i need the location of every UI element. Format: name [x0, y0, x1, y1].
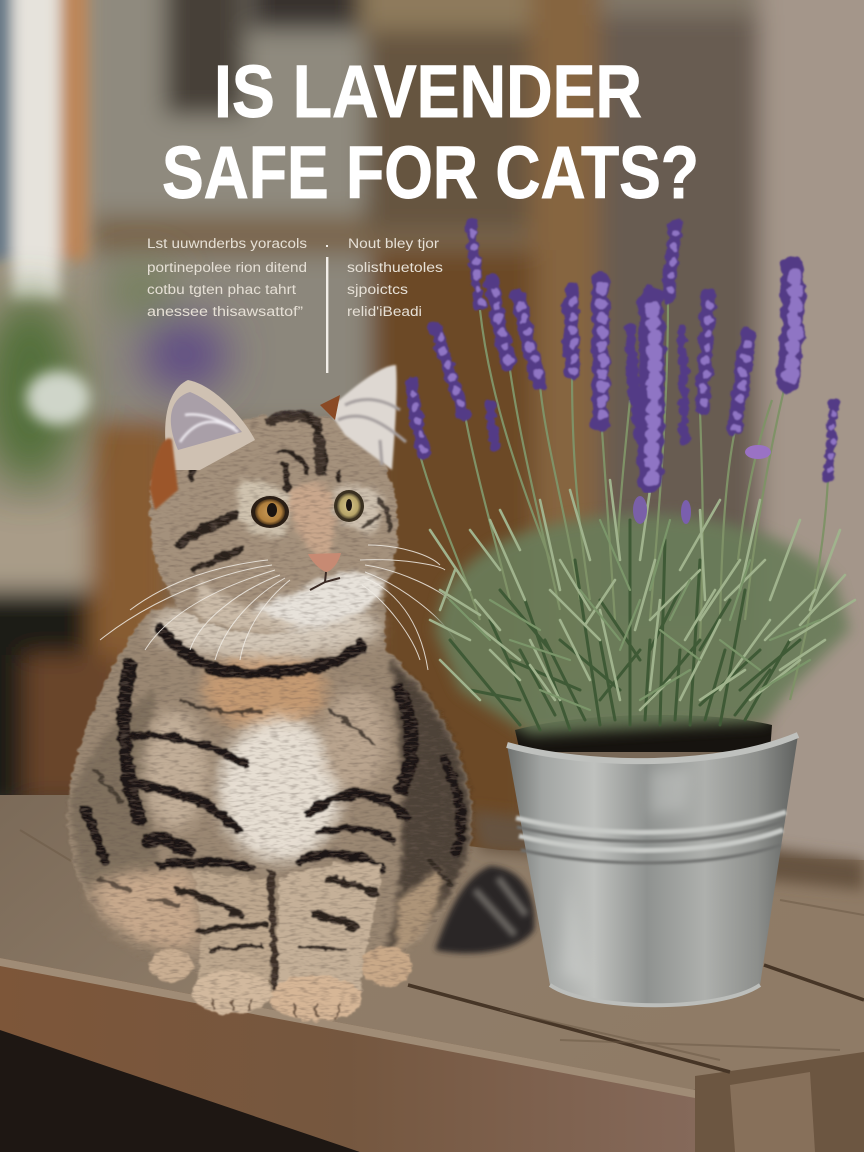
title: SAFE FOR CATS?	[162, 131, 699, 214]
column divider	[326, 245, 328, 373]
whiskers	[100, 545, 455, 670]
bucket rim	[507, 735, 798, 761]
table top surface	[0, 795, 864, 1090]
black inner pot	[515, 715, 772, 752]
front legs	[192, 870, 272, 985]
title: IS LAVENDER	[214, 50, 642, 133]
right text column: Nout bley tjor	[348, 236, 440, 251]
lavender plant	[412, 224, 855, 735]
head	[149, 414, 398, 633]
right ear	[320, 365, 406, 470]
head stripes	[178, 415, 390, 568]
tail	[435, 866, 534, 953]
back paws	[150, 949, 194, 981]
leaves dark	[450, 520, 800, 730]
cat	[68, 365, 534, 1021]
flower stems	[420, 300, 828, 700]
title	[162, 50, 699, 214]
left text column: Lst uuwnderbs yoracols	[147, 236, 307, 251]
left text column: anessee thisawsattof”	[147, 304, 303, 319]
wooden table	[0, 795, 864, 1152]
right text column: sjpoictcs	[347, 282, 408, 297]
front plank edge	[0, 958, 695, 1152]
left text column	[147, 236, 307, 319]
metal bucket	[507, 735, 798, 1005]
right plank edge	[695, 1052, 864, 1152]
chest fur	[203, 650, 327, 730]
furry body group	[68, 414, 472, 1021]
right text column: relid'iBeadi	[347, 304, 422, 319]
right text column	[347, 236, 443, 319]
leaves light	[430, 480, 855, 710]
flower spikes	[412, 224, 835, 480]
left ear	[150, 380, 255, 510]
left text column: portinepolee rion ditend	[147, 260, 307, 275]
bucket reflections	[560, 880, 590, 985]
body stripes	[85, 628, 461, 905]
foliage mass	[435, 514, 850, 735]
right text column: solisthuetoles	[347, 260, 443, 275]
left front paw	[192, 970, 272, 1014]
body	[68, 600, 472, 979]
right front paw	[270, 975, 362, 1021]
cat nose	[308, 553, 341, 572]
cat eyes	[251, 490, 364, 528]
left text column: cotbu tgten phac tahrt	[147, 282, 296, 297]
dark underside	[0, 1020, 360, 1152]
bucket body	[507, 735, 798, 1005]
plank gaps	[408, 965, 864, 1072]
bucket ribs	[516, 812, 786, 850]
